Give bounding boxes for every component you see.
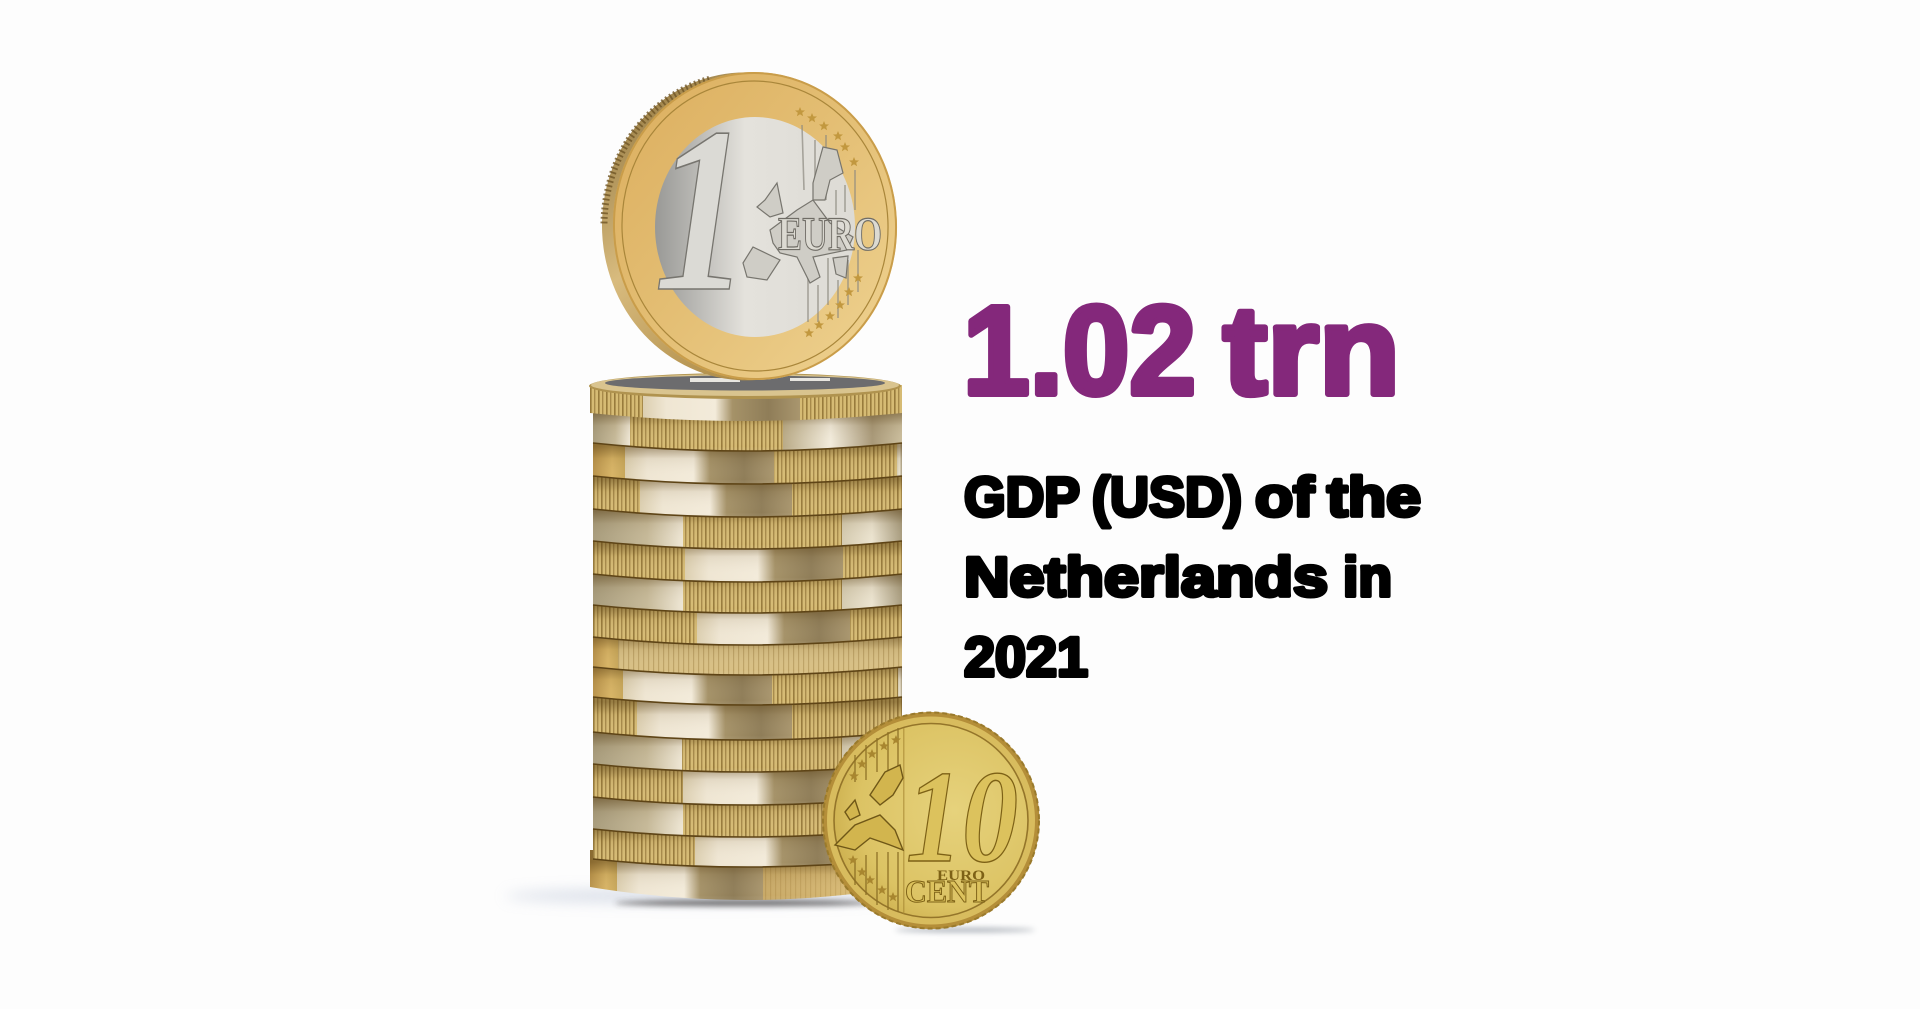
stripes on cent coin <box>855 728 898 912</box>
coin layer 16 <box>590 850 851 900</box>
reeded edge <box>600 76 710 224</box>
EURO lettering on cent coin: EURO <box>937 868 985 884</box>
stars on coin <box>795 107 863 337</box>
coin layer 9 <box>592 638 902 676</box>
description text: in <box>1343 545 1392 608</box>
map of Europe on cent coin <box>835 765 903 850</box>
coin layer 2 <box>592 413 902 452</box>
coin face and gold ring <box>606 66 904 386</box>
description text: the <box>1327 465 1421 528</box>
description text: of <box>1255 465 1314 528</box>
ten euro cent coin <box>822 712 1040 932</box>
top face of stack <box>589 373 901 399</box>
headline figure <box>963 280 1400 421</box>
stars on cent coin <box>848 735 901 901</box>
coin layer 15 <box>593 830 832 868</box>
coin face <box>834 724 1028 918</box>
headline figure: 1.02 <box>963 280 1196 421</box>
coin layer 11 <box>592 698 902 741</box>
numeral 1: 1 <box>654 80 750 341</box>
coin layer 3 <box>592 444 902 485</box>
silver centre <box>655 117 855 337</box>
coin rim <box>822 712 1040 929</box>
CENT lettering: CENT <box>905 873 989 909</box>
coin layer 5 <box>592 510 902 550</box>
coin edge <box>595 66 897 387</box>
stack of gold coins <box>589 371 902 920</box>
description text: 2021 <box>964 625 1088 688</box>
coin layer 14 <box>592 798 824 838</box>
coin stack shadow <box>505 889 895 906</box>
stripes on coin <box>802 125 858 322</box>
coin layer 4 <box>592 476 902 518</box>
description text: (USD) <box>1092 465 1242 528</box>
description text: GDP <box>964 465 1080 528</box>
EURO lettering: EURO <box>778 208 882 261</box>
coin layer 8 <box>592 606 902 646</box>
description text <box>964 465 1421 688</box>
numeral 10: 10 <box>906 743 1018 890</box>
map of Europe <box>743 147 853 283</box>
coin layer 13 <box>592 764 835 806</box>
description text: Netherlands <box>964 545 1328 608</box>
coin layer 7 <box>592 574 902 614</box>
coin layer 12 <box>592 732 862 773</box>
coin layer 6 <box>592 542 902 583</box>
headline figure: trn <box>1223 280 1400 421</box>
coin layer 10 <box>592 668 902 706</box>
one euro coin <box>595 66 904 387</box>
coin layer 1 <box>590 385 902 421</box>
coin shadow <box>895 928 1035 932</box>
